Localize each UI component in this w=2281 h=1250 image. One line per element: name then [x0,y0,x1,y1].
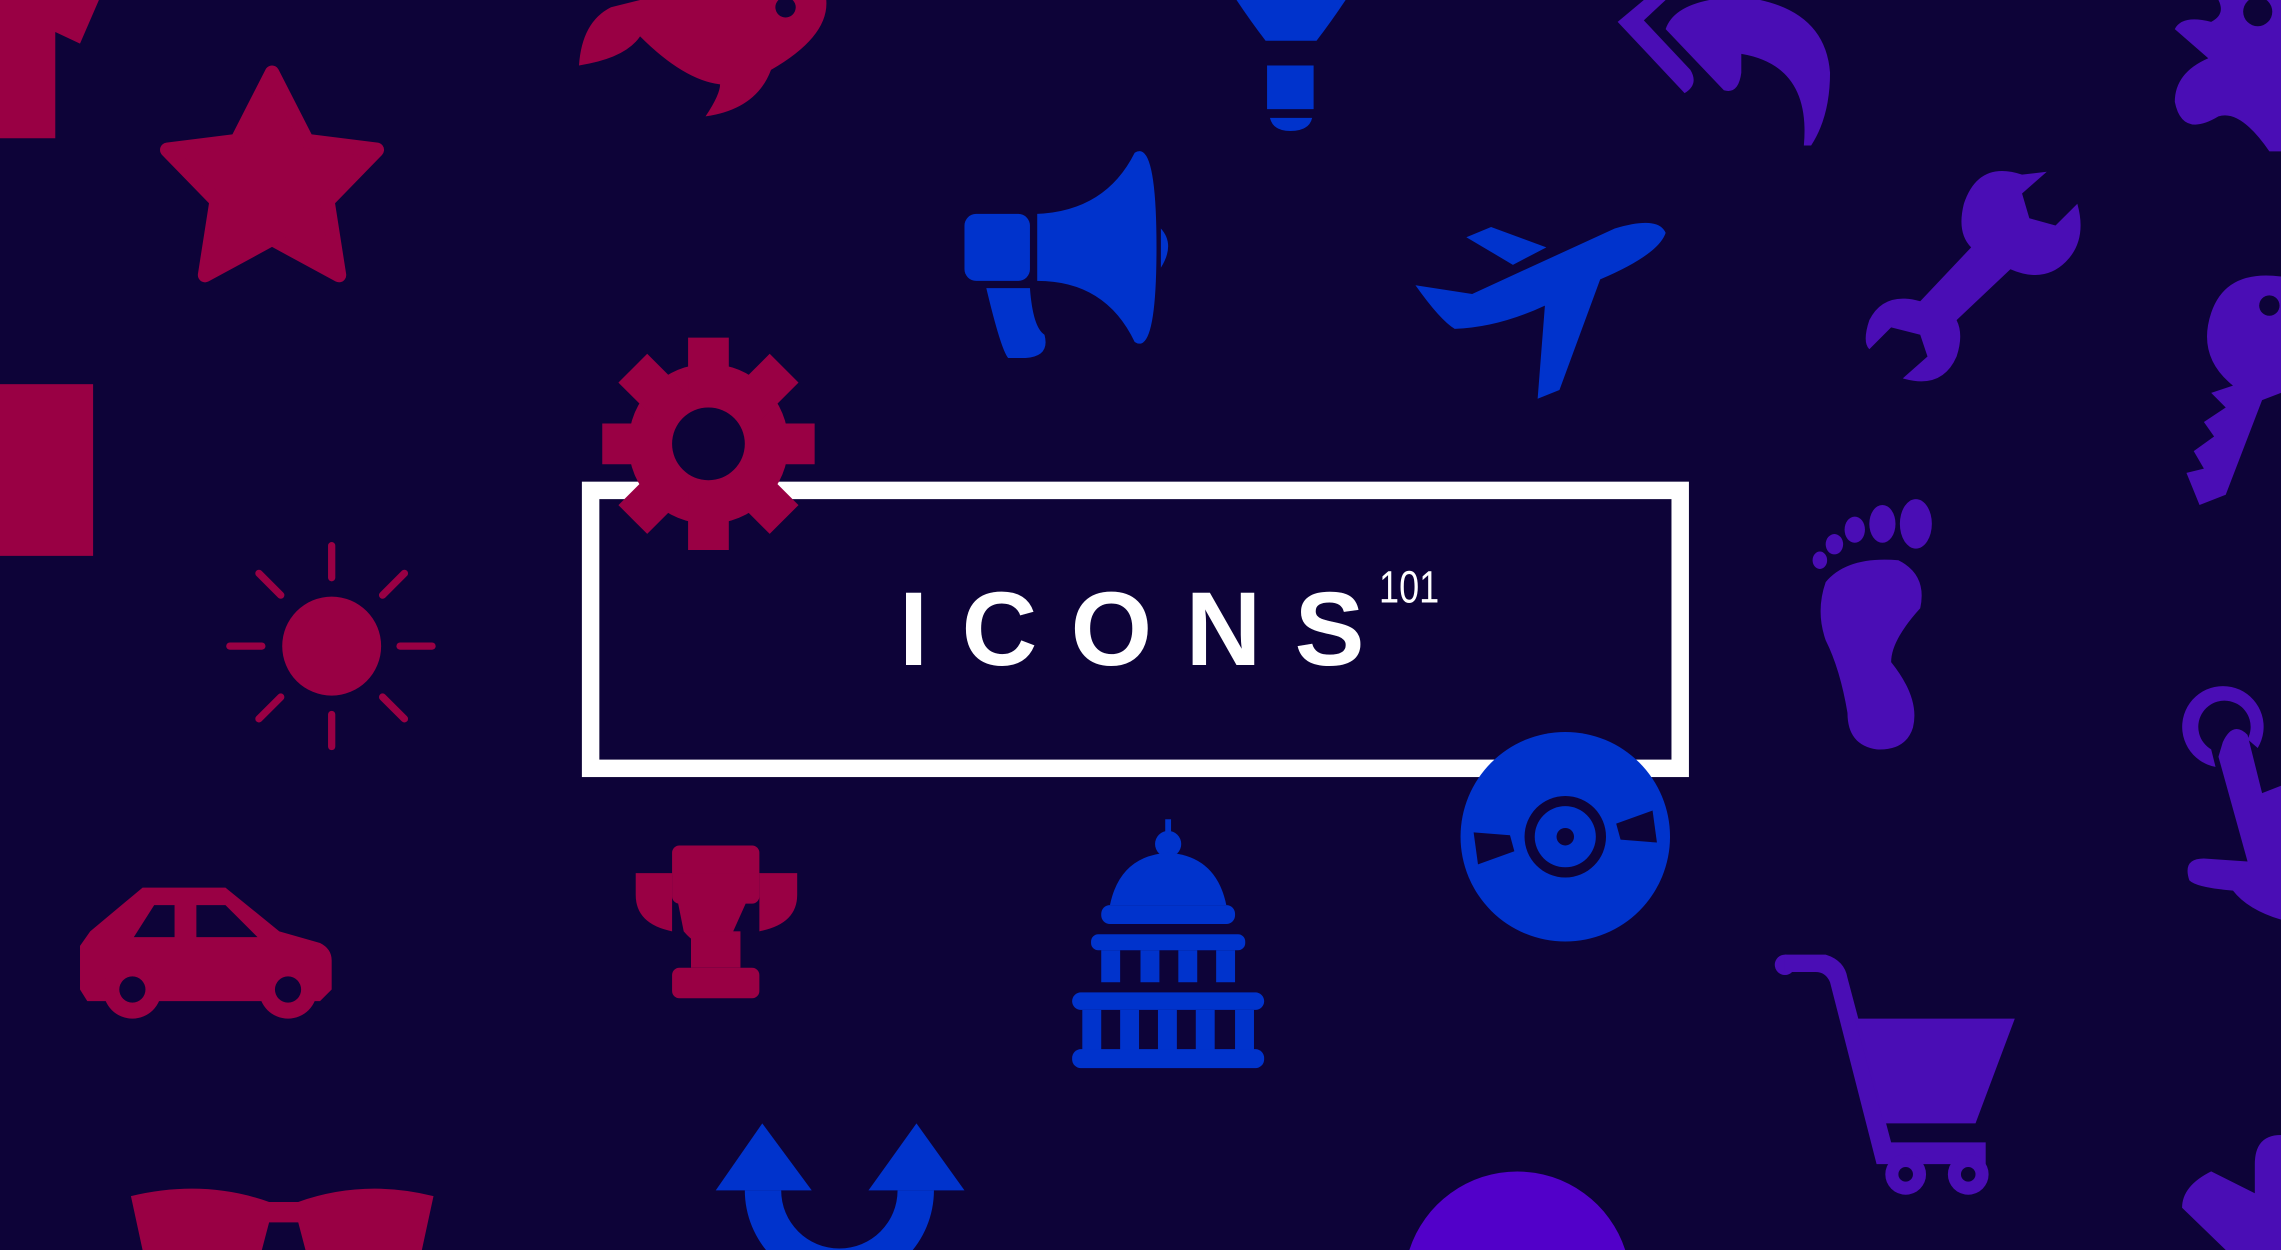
icon: airplane [1415,223,1666,399]
icon: trophy [636,845,797,998]
superscript 101: 101 [1379,562,1439,612]
icon: hand pointer partial [2182,686,2281,920]
icon: key partial [2186,275,2281,505]
icon: flag partial [0,0,99,138]
icon: car [80,888,332,1019]
icon: bottom right partial [2182,1135,2281,1250]
icon: puzzle partial [2175,0,2281,151]
icon: sunglasses [131,1189,434,1250]
icon: half circle [1409,1171,1625,1250]
icon: star [167,73,377,275]
icon: rectangle [0,384,93,556]
icon: arrows [716,1123,964,1250]
icon: rocket partial [579,0,826,116]
icon: capitol [1072,819,1264,1068]
icon: gear [602,338,815,550]
icon: purple arrows partial [1618,0,1830,146]
icon: cart [1775,955,2015,1195]
icon: wrench [1866,171,2081,381]
icon: disc [1461,732,1670,942]
icon: sun [230,546,432,747]
icon: lightbulb partial [1237,0,1346,131]
icon: megaphone [964,151,1168,358]
title text: ICONS [899,571,1398,688]
title box [591,490,1680,768]
icon: footprint [1813,499,1932,750]
